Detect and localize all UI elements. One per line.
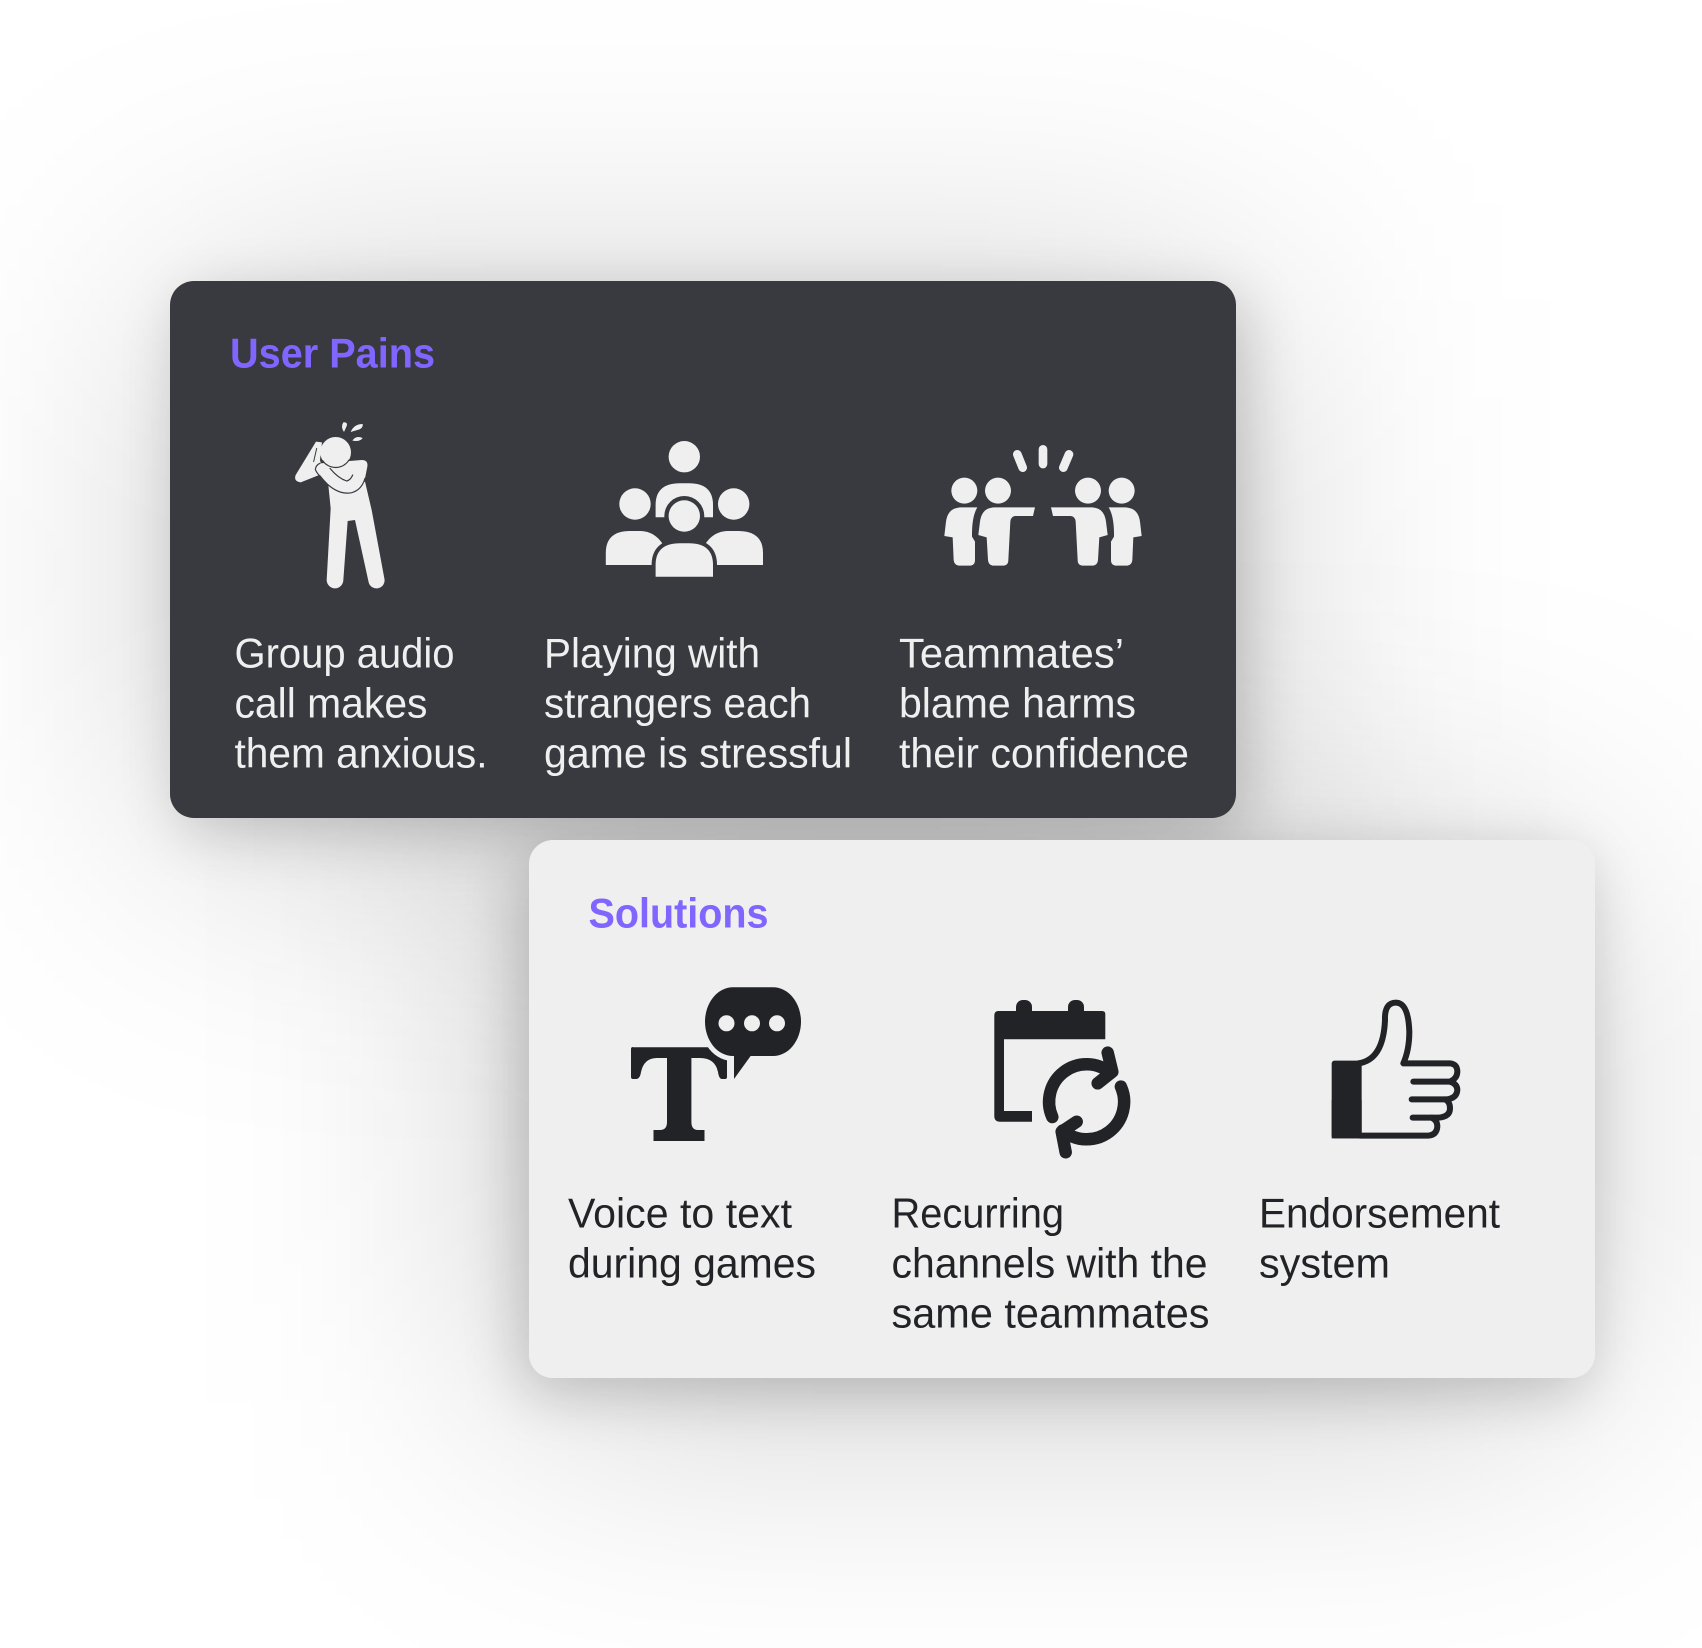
- text: teammates blame: blame harms: [899, 680, 1136, 726]
- text: group audio: call makes: [234, 680, 428, 726]
- text: playing with strangers: Playing with: [544, 630, 760, 676]
- text: voice to text: during games: [568, 1240, 816, 1286]
- text: teammates blame: [899, 630, 1189, 776]
- icon: voice to text: [631, 987, 801, 1141]
- text: teammates blame: their confidence: [899, 730, 1189, 776]
- text: group audio: them anxious.: [234, 730, 488, 776]
- text: voice to text: Voice to text: [568, 1190, 792, 1236]
- text: group audio: Group audio: [234, 630, 454, 676]
- icon: recurring calendar: [994, 1000, 1124, 1152]
- heading: user pains: User Pains: [230, 330, 435, 377]
- text: recurring channels: Recurring: [892, 1190, 1064, 1236]
- icon: group of strangers: [606, 441, 763, 577]
- text: recurring channels: channels with the: [892, 1240, 1208, 1286]
- icon: anxious person on phone: [295, 422, 385, 588]
- text: group audio: [234, 630, 488, 776]
- text: endorsement system: [1259, 1190, 1500, 1286]
- panel: solutions: [529, 840, 1595, 1378]
- text: teammates blame: Teammates’: [899, 630, 1124, 676]
- text: playing with strangers: strangers each: [544, 680, 811, 726]
- text: endorsement system: system: [1259, 1240, 1390, 1286]
- text: playing with strangers: game is stressful: [544, 730, 852, 776]
- text: recurring channels: [892, 1190, 1210, 1336]
- heading: solutions: Solutions: [588, 890, 768, 937]
- panel: user pains: [170, 281, 1236, 818]
- text: playing with strangers: [544, 630, 852, 776]
- icon: thumbs up: [1332, 1003, 1457, 1138]
- text: voice to text: [568, 1190, 816, 1286]
- icon: teammates blaming: [944, 449, 1142, 566]
- text: endorsement system: Endorsement: [1259, 1190, 1500, 1236]
- text: recurring channels: same teammates: [892, 1290, 1210, 1336]
